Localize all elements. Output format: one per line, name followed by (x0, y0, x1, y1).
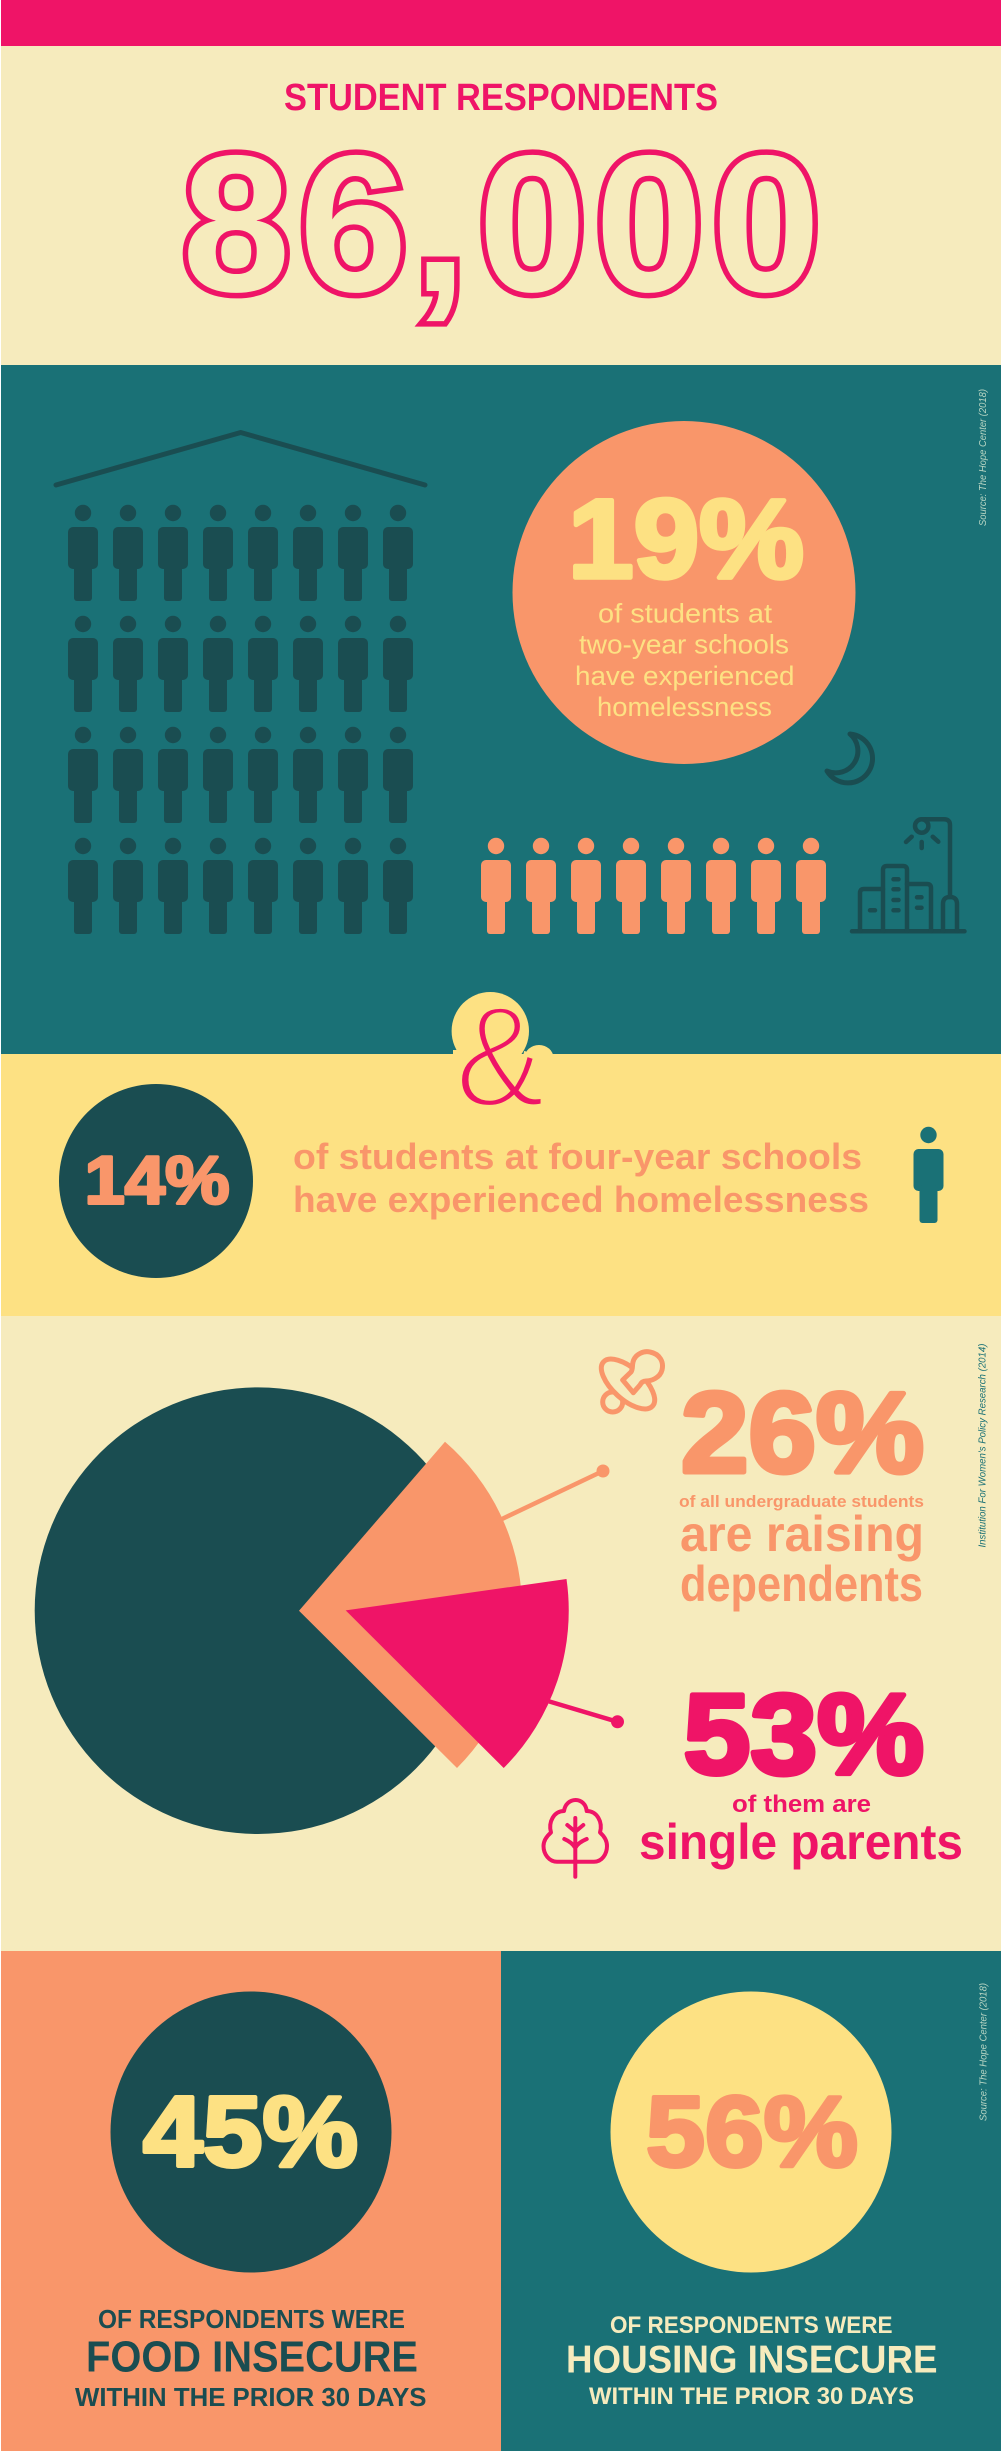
text: housing insecure description (566, 2312, 938, 2410)
text: two-year schools description (575, 599, 794, 722)
panel: food insecure (1, 1951, 501, 2451)
pie: all undergraduates (35, 1387, 481, 1834)
icon: single student (914, 1127, 944, 1223)
source note: Source: The Hope Center (2018) (978, 389, 989, 526)
callout: 56 percent circle (610, 1992, 892, 2272)
text: housing insecure description: WITHIN THE PRIOR 30 DAYS (589, 2383, 914, 2410)
leader line: 53% (549, 1701, 624, 1728)
text: two-year schools description: two-year schools (579, 630, 789, 660)
pie chart: student parents (35, 1387, 624, 1834)
panel: student parents (1, 1316, 1001, 1951)
icon: moon (827, 734, 873, 783)
text: food insecure description: FOOD INSECURE (86, 2334, 418, 2382)
text: raising dependents description (679, 1492, 924, 1612)
panel: student respondents (1, 46, 1001, 365)
text: housing insecure description: HOUSING INSECURE (566, 2339, 938, 2382)
text: food insecure description: WITHIN THE PRIOR 30 DAYS (75, 2382, 426, 2412)
icon: building roof (56, 432, 425, 485)
stat: 26%: 26% (681, 1370, 924, 1497)
icon: pacifier (593, 1350, 663, 1418)
text: single parents description: of them are (732, 1791, 871, 1818)
text: food insecure description: OF RESPONDENTS WERE (98, 2304, 405, 2334)
text: food insecure description (75, 2304, 426, 2412)
text: raising dependents description: are raising (680, 1506, 924, 1562)
text: four-year schools description (293, 1136, 869, 1220)
outlined number: 86,000: 86,000 (182, 115, 820, 333)
text: raising dependents description: dependents (680, 1556, 923, 1612)
text: two-year schools description: of students at (598, 599, 773, 629)
text: four-year schools description: have experienced homelessness (293, 1179, 869, 1220)
source note: Source: The Hope Center (2018) (978, 1983, 990, 2121)
text: two-year schools description: homelessness (597, 692, 772, 722)
text: housing insecure description: OF RESPONDENTS WERE (610, 2312, 892, 2339)
text: two-year schools description: have experienced (575, 661, 794, 691)
pie slice: single parents (346, 1579, 569, 1768)
stat: 56%: 56% (646, 2076, 858, 2188)
stat: 53%: 53% (684, 1672, 924, 1798)
stat: 19%: 19% (568, 476, 804, 602)
panel: housing insecure (501, 1951, 1001, 2451)
text: single parents description (639, 1791, 963, 1870)
pictogram: students in college building (68, 505, 413, 934)
callout: 45 percent circle (110, 1992, 392, 2272)
text: four-year schools description: of students at four-year schools (293, 1136, 862, 1177)
top bar (1, 0, 1001, 46)
text: ampersand: & (455, 976, 545, 1137)
icon: tree (544, 1800, 607, 1877)
pictogram: homeless students (481, 838, 826, 934)
callout: 14 percent circle (59, 1084, 253, 1278)
text: single parents description: single parents (639, 1814, 963, 1870)
stat: 14%: 14% (84, 1142, 230, 1218)
icon: city and street lamp (852, 819, 964, 931)
pie slice: raising dependents (299, 1442, 522, 1768)
panel: four-year schools (1, 976, 1001, 1316)
panel: two-year schools (1, 365, 1001, 1054)
leader line: 26% (502, 1464, 610, 1519)
source note: Institution For Women's Policy Research (2014) (976, 1344, 988, 1548)
callout: 19 percent circle (512, 421, 856, 764)
heading: student respondents: STUDENT RESPONDENTS (284, 77, 718, 119)
stat: 45%: 45% (143, 2076, 358, 2188)
text: raising dependents description: of all undergraduate students (679, 1492, 924, 1511)
ampersand badge (452, 976, 554, 1137)
